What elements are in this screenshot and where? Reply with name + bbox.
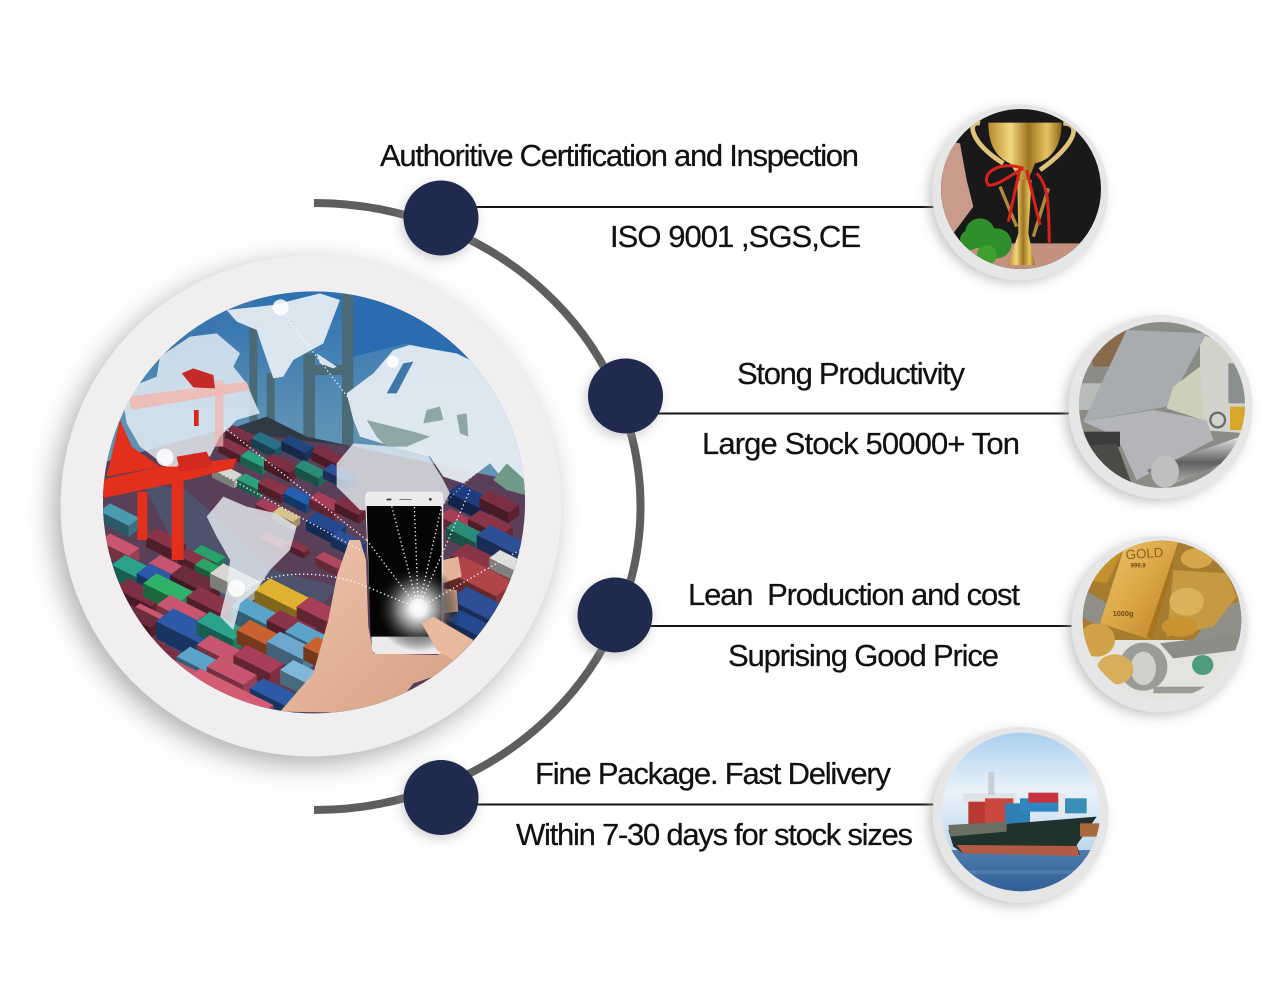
bridge towers bbox=[249, 293, 353, 447]
globe shadow bbox=[54, 264, 554, 764]
timeline node 1 bbox=[402, 180, 478, 259]
panel: cargo ship badge bbox=[929, 727, 1108, 906]
crane pieces seen through map bbox=[128, 368, 250, 472]
red harbour crane bbox=[100, 420, 237, 560]
subheading 3: Suprising Good Price bbox=[728, 638, 999, 673]
map nodes bbox=[156, 299, 399, 597]
connector line 4 bbox=[470, 804, 935, 806]
icon: gold and dollars photo: 999.9 bbox=[1131, 563, 1146, 569]
icon: cargo ship photo bbox=[940, 730, 1103, 893]
connector line 2 bbox=[655, 412, 1072, 414]
world map overlay bbox=[123, 293, 527, 630]
superstructure bbox=[963, 793, 1017, 803]
timeline node 4 bbox=[402, 760, 478, 838]
heading 2: Stong Productivity bbox=[737, 356, 966, 391]
icon: film machine photo bbox=[1077, 320, 1250, 493]
phone in hand bbox=[280, 492, 475, 713]
connector line 3 bbox=[645, 625, 1077, 627]
connector line 1 bbox=[470, 206, 935, 208]
panel: productivity badge bbox=[1065, 315, 1252, 502]
dotted network lines bbox=[220, 313, 520, 608]
globe frame bbox=[60, 256, 562, 756]
subheading 1: ISO 9001 ,SGS,CE bbox=[610, 219, 861, 254]
subheading 2: Large Stock 50000+ Ton bbox=[702, 426, 1020, 461]
heading 1: Authoritive Certification and Inspection bbox=[380, 138, 859, 173]
hull bbox=[948, 817, 1097, 855]
heading 3: Lean Production and cost bbox=[688, 577, 1020, 612]
timeline node 2 bbox=[586, 358, 663, 437]
container yard bbox=[100, 430, 527, 717]
icon: trophy photo bbox=[937, 107, 1107, 273]
curved timeline arc bbox=[314, 203, 641, 810]
icon: gold and dollars photo: GOLD bbox=[1125, 545, 1164, 562]
timeline node 3 bbox=[576, 578, 652, 656]
infographic canvas bbox=[36, 103, 1253, 912]
heading 4: Fine Package. Fast Delivery bbox=[535, 756, 892, 791]
icon: gold and dollars photo: 1000g bbox=[1113, 609, 1133, 618]
subheading 4: Within 7-30 days for stock sizes bbox=[516, 817, 913, 852]
globe photo: port, world map, phone bbox=[99, 290, 530, 728]
panel: gold badge bbox=[1068, 536, 1248, 716]
panel: trophy badge bbox=[929, 104, 1108, 283]
panel: central logistics globe bbox=[54, 256, 562, 764]
icon: gold and dollars photo bbox=[1078, 537, 1243, 703]
